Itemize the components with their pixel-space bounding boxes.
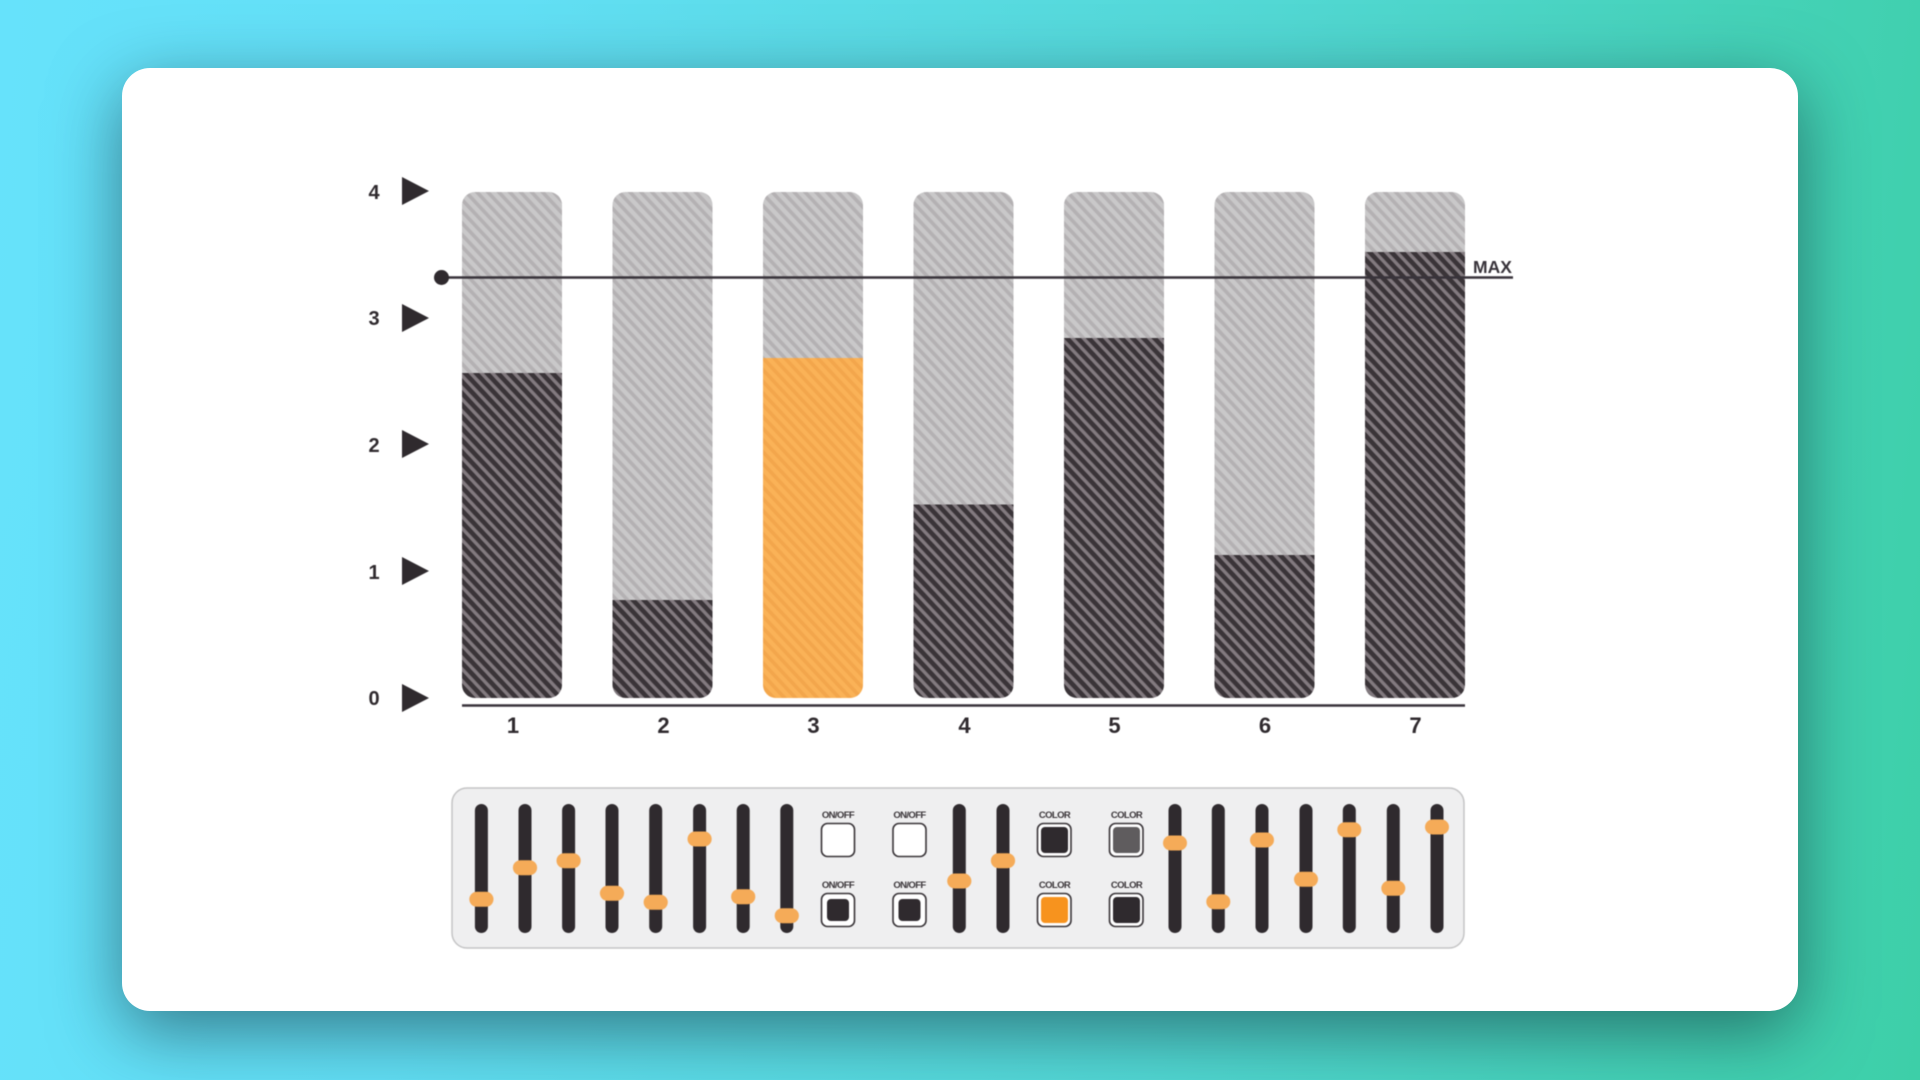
y axis — [368, 177, 429, 712]
x axis: 1 — [507, 713, 519, 738]
bar 4 — [914, 192, 1014, 698]
bar 5 — [1064, 192, 1164, 698]
right sliders — [1163, 804, 1449, 933]
bar 6 — [1214, 192, 1314, 698]
x axis: 7 — [1409, 713, 1422, 738]
bar 2 — [612, 192, 712, 698]
on/off buttons: ON/OFF — [822, 810, 855, 821]
color buttons: COLOR — [1111, 880, 1143, 891]
max line — [434, 257, 1513, 285]
bar 3 highlighted — [763, 192, 863, 698]
y tick 0: 0 — [368, 688, 380, 710]
x axis: 4 — [958, 713, 971, 738]
y tick 4 — [368, 177, 429, 205]
color buttons: COLOR — [1039, 810, 1071, 821]
y tick 0 — [368, 684, 429, 712]
x axis: 5 — [1108, 713, 1121, 738]
x axis — [462, 706, 1465, 738]
control panel — [452, 788, 1464, 948]
color buttons: COLOR — [1111, 810, 1143, 821]
y tick 2 — [368, 430, 429, 458]
x axis: 6 — [1259, 713, 1271, 738]
y tick 3 — [368, 304, 429, 332]
on/off buttons: ON/OFF — [893, 810, 926, 821]
color buttons: COLOR — [1039, 880, 1071, 891]
y tick 1: 1 — [368, 562, 380, 584]
bars — [462, 192, 1465, 698]
y tick 3: 3 — [368, 308, 380, 330]
infographic — [368, 176, 1514, 950]
y tick 4: 4 — [368, 182, 380, 204]
color buttons — [1038, 810, 1143, 926]
y tick 2: 2 — [368, 435, 380, 457]
max label: MAX — [1473, 257, 1512, 277]
on/off buttons: ON/OFF — [893, 880, 926, 891]
x axis: 3 — [807, 713, 820, 738]
left sliders — [469, 804, 799, 933]
bar 1 — [462, 192, 562, 698]
on/off buttons: ON/OFF — [822, 880, 855, 891]
x axis: 2 — [657, 713, 670, 738]
middle sliders — [947, 804, 1015, 933]
on/off buttons — [822, 810, 926, 926]
y tick 1 — [368, 557, 429, 585]
white card — [122, 68, 1798, 1011]
bar 7 — [1365, 192, 1465, 698]
